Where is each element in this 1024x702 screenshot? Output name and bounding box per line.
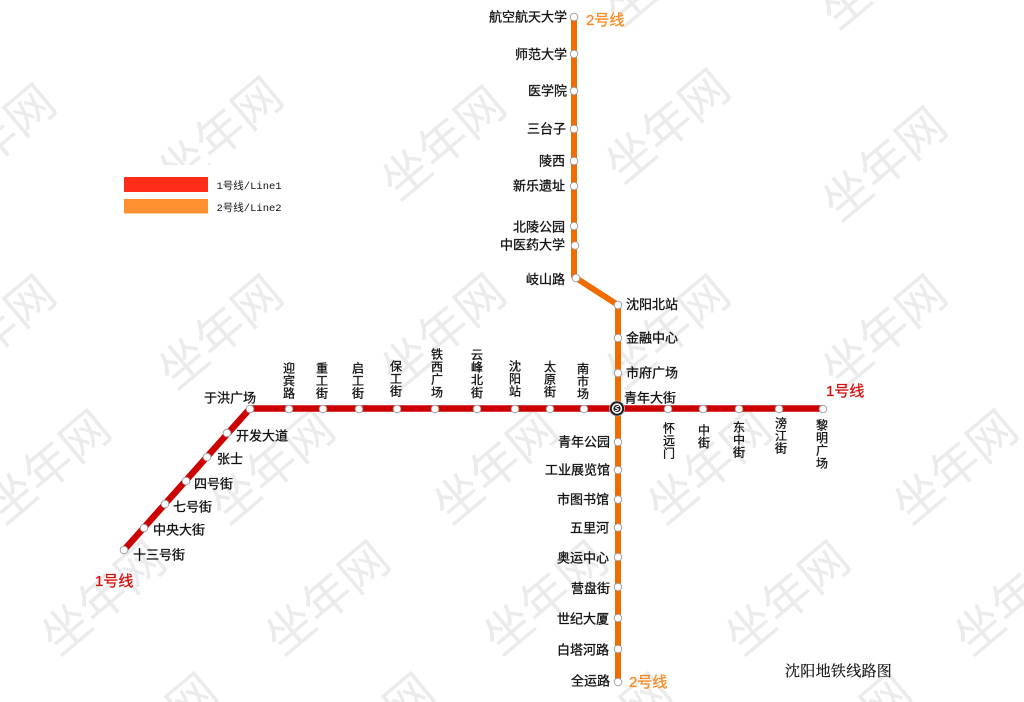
- station: 启工街: 启: [352, 362, 364, 376]
- watermarks: 坐年网: [149, 267, 293, 400]
- station: 重工街: 工: [316, 374, 328, 388]
- line label: 2号线 bottom: 2号线: [629, 674, 667, 691]
- station: 云峰北街: 峰: [471, 361, 483, 375]
- station: 沈阳站: [509, 358, 521, 413]
- station: 黎明广场: 广: [816, 444, 828, 458]
- station: 太原街: 街: [544, 385, 556, 399]
- legend label: line 2: 2号线/Line2: [216, 201, 282, 215]
- station: 启工街: 工: [352, 374, 364, 388]
- watermarks: 坐年网: [256, 533, 400, 666]
- station: 全运路: 全运路: [571, 674, 610, 688]
- station: 云峰北街: 云: [471, 348, 483, 362]
- station: 云峰北街: [471, 348, 483, 413]
- watermarks: 坐年网: [813, 267, 957, 400]
- legend swatch: line 2: [124, 199, 208, 214]
- station: 南市场: 南: [577, 361, 589, 376]
- interchange icon: [610, 401, 624, 416]
- station: 黎明广场: [816, 405, 828, 470]
- legend swatch: line 1: [124, 177, 208, 192]
- line 1 southwest stations: [120, 390, 288, 562]
- station: 开发大道: 开发大道: [236, 428, 288, 444]
- station: 滂江街: 街: [775, 442, 787, 456]
- station: 中街: [698, 405, 710, 450]
- station: 沈阳站: 沈: [509, 358, 521, 374]
- station: 南市场: [577, 361, 589, 413]
- watermarks: 坐年网: [474, 533, 618, 666]
- station: 云峰北街: 北: [471, 373, 483, 387]
- station: 中街: 中: [698, 422, 710, 438]
- watermarks: 坐年网: [884, 402, 1024, 535]
- station: 怀远门: 远: [663, 434, 675, 448]
- station: 怀远门: 怀: [663, 422, 675, 436]
- station: 世纪大厦: 世纪大厦: [557, 612, 609, 626]
- station: 沈阳站: 站: [509, 385, 521, 399]
- watermarks: 坐年网: [638, 402, 782, 535]
- station: 太原街: 原: [544, 373, 556, 387]
- legend: [121, 165, 291, 233]
- metro line 2 route: [574, 17, 618, 681]
- interchange label: 青年大街: [624, 390, 676, 406]
- station: 新乐遗址: 新乐遗址: [513, 178, 565, 194]
- station: 北陵公园: 北陵公园: [513, 220, 565, 234]
- station: 工业展览馆: 工业展览馆: [545, 462, 610, 478]
- station: 黎明广场: 明: [816, 431, 828, 445]
- station: 保工街: 保: [390, 360, 402, 374]
- watermarks: 坐年网: [149, 69, 293, 202]
- watermarks: 坐年网: [596, 267, 740, 400]
- map title: 沈阳地铁线路图: [785, 662, 892, 680]
- station: 保工街: 街: [390, 385, 402, 399]
- station: 重工街: [316, 362, 328, 413]
- station: 陵西: [539, 154, 578, 168]
- station: 岐山路: 岐山路: [526, 272, 565, 287]
- station: 重工街: 重: [316, 362, 328, 376]
- watermarks: 坐年网: [424, 402, 568, 535]
- station: 东中街: [733, 405, 745, 460]
- watermarks: bottom row cropped by frame: [0, 640, 1024, 702]
- watermarks: 坐年网: [372, 266, 516, 399]
- station: 云峰北街: 街: [471, 386, 483, 400]
- watermarks: 坐年网: [813, 99, 957, 232]
- line label: 2号线 top: 2号线: [586, 12, 624, 29]
- station: 五里河: 五里河: [570, 520, 609, 536]
- station: 迎宾路: [283, 362, 295, 413]
- station: 保工街: [390, 360, 402, 413]
- station: 迎宾路: 路: [283, 386, 295, 401]
- station: 金融中心: 金融中心: [626, 330, 678, 346]
- station: 迎宾路: 迎: [283, 362, 295, 376]
- station: 医学院: 医学院: [528, 84, 567, 98]
- station: 三台子: 三台子: [527, 122, 566, 136]
- line label: 1号线 left: 1号线: [95, 573, 133, 590]
- watermarks: 坐年网: [716, 533, 860, 666]
- station: 中央大街: 中央大街: [153, 522, 205, 538]
- station: 于洪广场: [204, 390, 256, 413]
- line 2 north stations: [489, 10, 678, 380]
- station: 铁西广场: 广: [431, 373, 443, 387]
- metro line 1 route: [124, 408, 823, 550]
- watermarks: 坐年网: [201, 402, 345, 535]
- station: 奥运中心: 奥运中心: [557, 550, 609, 566]
- line 2 south stations: [545, 434, 622, 688]
- station: 太原街: [544, 359, 556, 413]
- station: 启工街: 街: [352, 387, 364, 401]
- station: 沈阳北站: 沈阳北站: [626, 297, 678, 312]
- station: 东中街: 东: [733, 420, 745, 434]
- station: 黎明广场: 黎: [816, 418, 828, 432]
- station: 四号街: 四号街: [194, 476, 233, 492]
- station: 十三号街: 十三号街: [133, 548, 185, 562]
- station: 铁西广场: 铁: [431, 348, 443, 362]
- station: 太原街: 太: [544, 359, 556, 374]
- station: 市府广场: 市府广场: [626, 366, 678, 380]
- station: 营盘街: 营盘街: [571, 581, 610, 596]
- station: 保工街: 工: [390, 372, 402, 386]
- station: 重工街: 街: [316, 387, 328, 401]
- station: 航空航天大学: 航空航天大学: [489, 10, 567, 24]
- station: 中街: 街: [698, 436, 710, 450]
- station: 师范大学: 师范大学: [515, 47, 567, 62]
- station: 七号街: 七号街: [173, 500, 212, 514]
- station: 滂江街: 江: [775, 429, 787, 443]
- station: 张士: 张士: [217, 452, 243, 466]
- station: 启工街: [352, 362, 364, 413]
- station: 怀远门: 门: [663, 446, 675, 461]
- station: 滂江街: [775, 405, 787, 456]
- legend label: line 1: 1号线/Line1: [216, 179, 282, 193]
- line 1 east stations: [663, 405, 828, 470]
- station: 铁西广场: [431, 348, 443, 413]
- station: 怀远门: [663, 405, 675, 461]
- station: 青年公园: 青年公园: [558, 434, 610, 450]
- station: 黎明广场: 场: [816, 456, 828, 470]
- station: 中医药大学: 中医药大学: [500, 238, 565, 252]
- station: 东中街: 街: [733, 446, 745, 460]
- line label: 1号线 right: 1号线: [826, 383, 864, 400]
- station: 滂江街: 滂: [775, 416, 787, 430]
- station: 铁西广场: 场: [431, 385, 443, 399]
- station: 迎宾路: 宾: [283, 373, 295, 388]
- watermarks: 坐年网: [32, 533, 176, 666]
- station: 白塔河路: 白塔河路: [557, 642, 609, 658]
- station: 东中街: 中: [733, 432, 745, 447]
- station: 南市场: 场: [577, 387, 589, 401]
- station: 沈阳站: 阳: [509, 372, 521, 386]
- station: 南市场: 市: [577, 374, 589, 389]
- line 1 central stations: [283, 348, 589, 413]
- station: 市图书馆: 市图书馆: [557, 492, 609, 507]
- interchange: 青年大街: [610, 390, 676, 416]
- station: 于洪广场: 于洪广场: [204, 390, 256, 406]
- watermarks: 坐年网: [372, 78, 516, 211]
- station: 铁西广场: 西: [431, 360, 443, 374]
- station: 陵西: 陵西: [539, 154, 565, 168]
- watermarks: 坐年网: [596, 61, 740, 194]
- station: 张士: [203, 452, 243, 466]
